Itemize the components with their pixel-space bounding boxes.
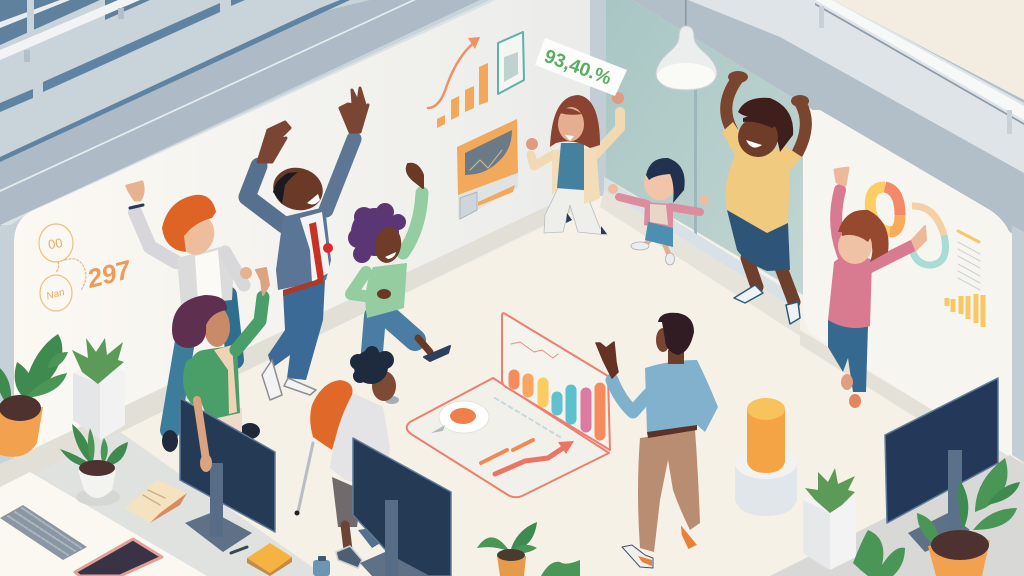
yellow box and pen [231, 543, 292, 576]
tablet [75, 539, 162, 576]
orange cylinder on pedestal [735, 398, 797, 516]
wall monitor panel [457, 119, 518, 220]
wall document [498, 32, 524, 94]
plant: bottom right small [853, 530, 905, 576]
person: child in pink jacket [608, 158, 709, 265]
plant: right white box spiky [803, 468, 856, 570]
grey platform [0, 432, 325, 576]
wall icons and number 297: 297 [83, 254, 135, 294]
monitor right [885, 378, 998, 552]
keyboard [0, 505, 87, 560]
chair [294, 380, 352, 516]
plant: bottom right pot [917, 458, 1020, 576]
notebook [125, 480, 187, 523]
plant: white box spiky [72, 338, 125, 440]
desk [0, 472, 207, 576]
bar chart [947, 294, 983, 327]
plant: white bowl [60, 424, 128, 506]
percentage sign [535, 38, 627, 96]
percentage sign: 93,40.% [541, 46, 614, 90]
donut chart [870, 187, 900, 232]
hanging lamp [656, 0, 717, 90]
right baseboard [800, 330, 1024, 470]
plant: centre bottom [477, 522, 580, 576]
right pillar [1012, 225, 1024, 462]
wall icons and number 297: 00 [47, 235, 64, 252]
person: woman in pink top [828, 168, 926, 408]
floor chart board [407, 313, 610, 497]
monitor centre [353, 438, 451, 576]
cup [313, 556, 330, 576]
architecture: upper right beams and railing [632, 0, 1024, 240]
person: kneeling woman holding sign [526, 92, 624, 235]
left wall [0, 0, 590, 490]
monitor left [180, 398, 275, 552]
wall icons and number 297 [39, 224, 135, 311]
plant: left orange pot [0, 334, 68, 457]
right platform [770, 455, 1024, 576]
ring chart [912, 206, 946, 265]
wall icons and number 297: Nan [45, 287, 66, 302]
architecture: back window and column [590, 0, 805, 336]
person: man in suit with red tie [247, 88, 368, 400]
person: orange-haired woman [127, 182, 252, 452]
person: woman with purple afro [348, 164, 450, 404]
person: man seen from behind [596, 313, 718, 568]
left baseboard [0, 186, 600, 491]
person: woman in yellow shirt [722, 71, 809, 324]
architecture: upper left beams and railing [0, 0, 600, 470]
right wall charts [870, 187, 983, 327]
wall chart: rising arrow and bars [428, 37, 488, 128]
green-cardigan woman's forearm in front of monitor [197, 400, 212, 472]
person: seated person in white shirt [294, 346, 396, 568]
left pillar [0, 212, 30, 445]
right wall [803, 110, 1012, 460]
person: woman in green cardigan [172, 268, 269, 439]
